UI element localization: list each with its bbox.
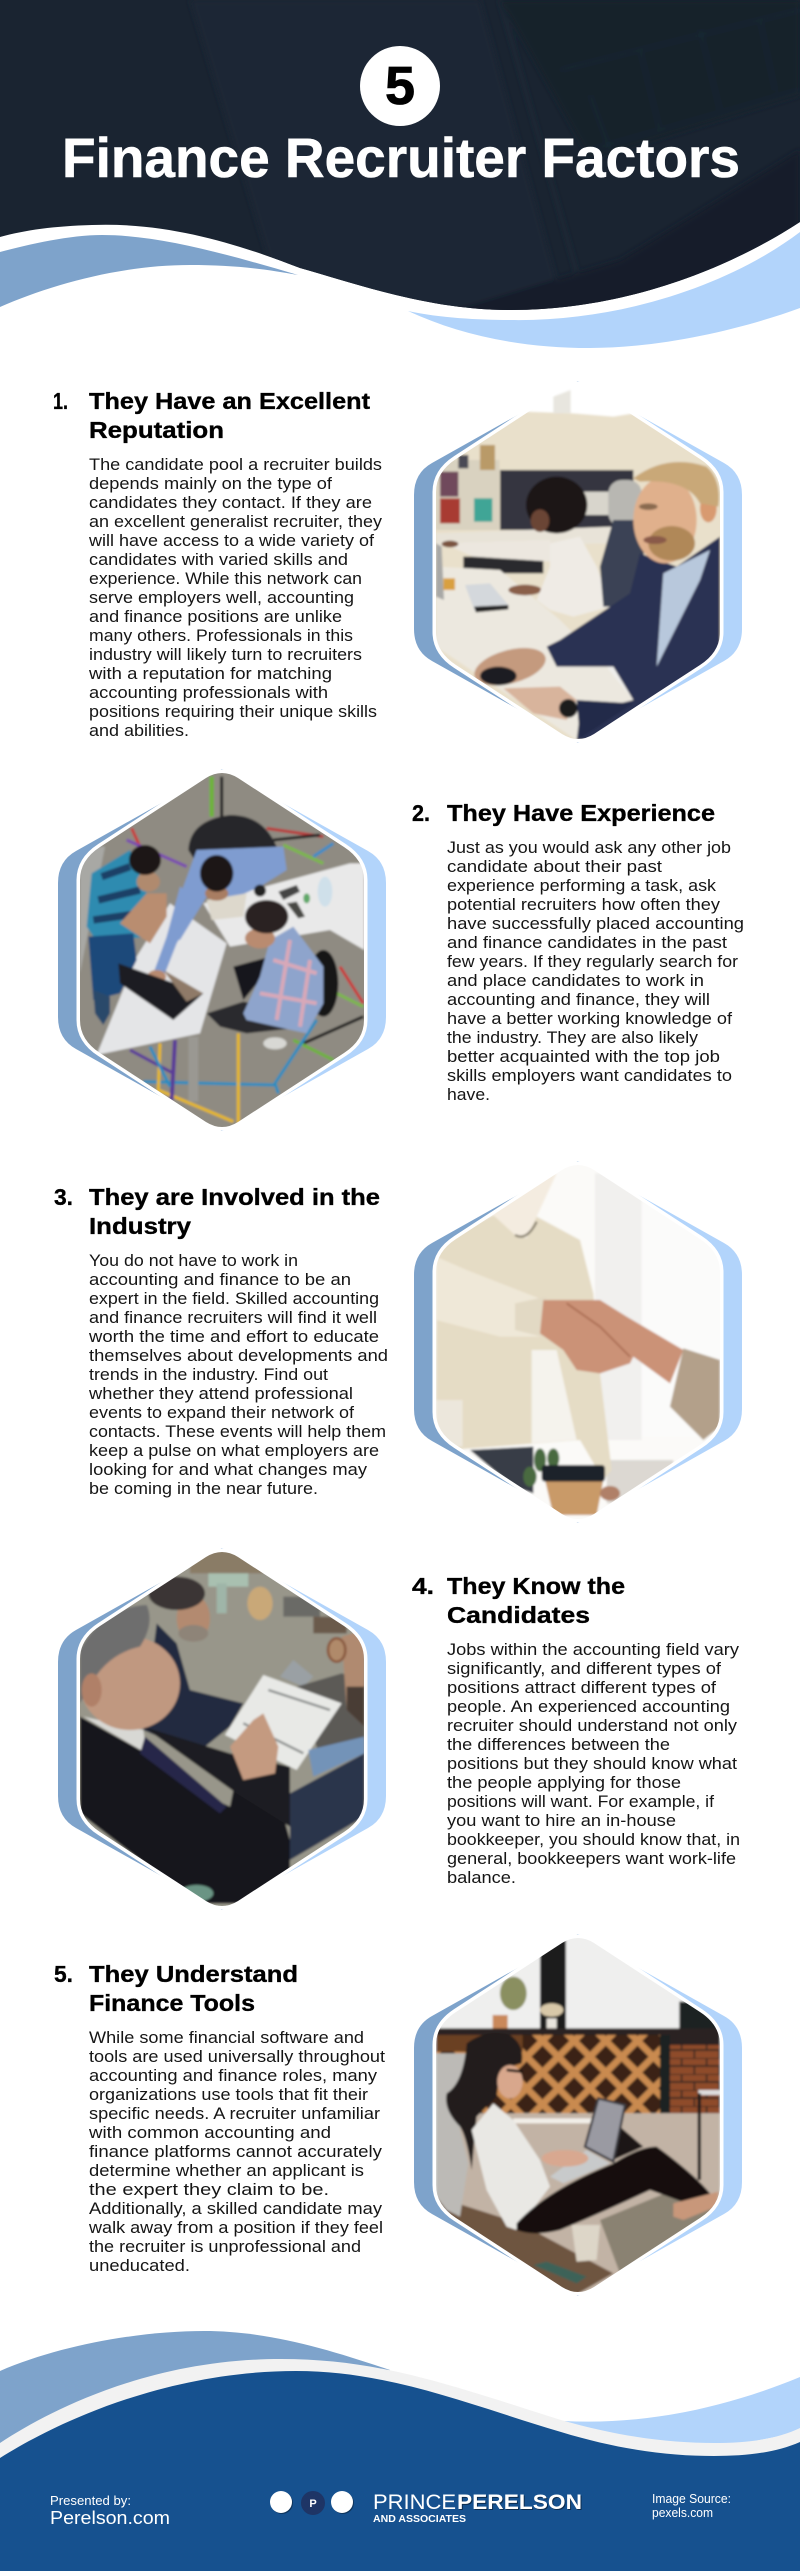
body text 4: bookkeeper, you should know that, in [447, 1831, 740, 1849]
heading 4: Candidates [447, 1602, 590, 1628]
body text 5: finance platforms cannot accurately [89, 2143, 383, 2161]
body text 1: experience. While this network can [89, 570, 362, 588]
image source: pexels.com [652, 2506, 713, 2520]
body text 2: candidate about their past [447, 858, 662, 876]
section 2: experience [30, 760, 744, 1140]
body text 4: recruiter should understand not only [447, 1717, 738, 1735]
body text 4: the people applying for those [447, 1774, 681, 1792]
body text 2: few years. If they regularly search for [447, 953, 739, 971]
section 4: know the candidates [30, 1540, 740, 1920]
heading 4: They Know the [447, 1573, 625, 1599]
body text 2: have successfully placed accounting [447, 915, 744, 933]
logo [270, 2491, 582, 2525]
header right wave [408, 232, 800, 348]
logo: PERELSON [457, 2491, 582, 2514]
body text 1: many others. Professionals in this [89, 627, 353, 645]
body text 3: worth the time and effort to educate [88, 1328, 379, 1346]
heading 5: They Understand [89, 1961, 298, 1987]
heading 1: They Have an Excellent [89, 388, 370, 414]
footer [0, 2331, 800, 2571]
footer divider band [0, 2359, 800, 2571]
body text 1: an excellent generalist recruiter, they [89, 513, 383, 531]
body text 2: Just as you would ask any other job [447, 839, 731, 857]
heading 3 [54, 1184, 380, 1239]
presented by: Presented by: [50, 2494, 131, 2508]
body text 4: people. An experienced accounting [447, 1698, 730, 1716]
body text 5: the recruiter is unprofessional and [89, 2238, 361, 2256]
body text 5: Additionally, a skilled candidate may [89, 2200, 383, 2218]
body text 1: with a reputation for matching [88, 665, 332, 683]
body text 5: tools are used universally throughout [89, 2048, 385, 2066]
body text 5: While some financial software and [89, 2029, 364, 2047]
heading 2: They Have Experience [447, 800, 715, 826]
body text 3: contacts. These events will help them [89, 1423, 386, 1441]
body text 2 [447, 839, 744, 1104]
hexagon photo 4: businessmen reviewing chart [58, 1548, 386, 1910]
body text 3: expert in the field. Skilled accounting [89, 1290, 379, 1308]
heading 4: 4. [412, 1573, 434, 1599]
image source [652, 2492, 731, 2520]
body text 2: have. [447, 1086, 490, 1104]
body text 2: accounting and finance, they will [447, 991, 710, 1009]
body text 5: accounting and finance roles, many [89, 2067, 378, 2085]
section 5: finance tools [54, 1934, 742, 2296]
body text 3: looking for and what changes may [89, 1461, 368, 1479]
body text 3 [88, 1252, 388, 1498]
header photo background [0, 0, 800, 330]
title: Finance Recruiter Factors [62, 126, 740, 189]
body text 5 [88, 2029, 385, 2275]
body text 4: Jobs within the accounting field vary [447, 1641, 740, 1659]
body text 2: have a better working knowledge of [447, 1010, 732, 1028]
body text 3: accounting and finance to be an [89, 1271, 351, 1289]
body text 4: significantly, and different types of [447, 1660, 721, 1678]
body text 4: positions attract different types of [447, 1679, 716, 1697]
section 1: excellent reputation [54, 381, 742, 743]
footer panel [0, 2371, 800, 2571]
presented by: Perelson.com [50, 2508, 170, 2528]
body text 1: positions requiring their unique skills [89, 703, 377, 721]
heading 1 [53, 388, 370, 443]
image source: Image Source: [652, 2492, 731, 2506]
body text 3: trends in the industry. Find out [89, 1366, 328, 1384]
body text 4: balance. [447, 1869, 516, 1887]
body text 5: specific needs. A recruiter unfamiliar [89, 2105, 381, 2123]
header left wave [0, 235, 298, 307]
header banner [0, 0, 800, 348]
hexagon photo 3: handshake [414, 1161, 742, 1523]
body text 4: general, bookkeepers want work-life [447, 1850, 736, 1868]
body text 2: better acquainted with the top job [447, 1048, 720, 1066]
body text 2: experience performing a task, ask [447, 877, 717, 895]
section 3: involved in the industry [54, 1161, 742, 1523]
body text 3: and finance recruiters will find it well [89, 1309, 377, 1327]
body text 2: and place candidates to work in [447, 972, 704, 990]
body text 1: candidates with varied skills and [89, 551, 348, 569]
heading 3: Industry [89, 1213, 191, 1239]
hexagon photo 2: team around table [58, 769, 386, 1131]
body text 3: keep a pulse on what employers are [89, 1442, 379, 1460]
body text 5: with common accounting and [88, 2124, 331, 2142]
body text 2: the industry. They are also likely [447, 1029, 699, 1047]
body text 5: uneducated. [89, 2257, 190, 2275]
heading 2: 2. [412, 800, 430, 826]
body text 4: you want to hire an in-house [447, 1812, 676, 1830]
body text 1: will have access to a wide variety of [88, 532, 374, 550]
body text 1: and abilities. [89, 722, 189, 740]
body text 5: walk away from a position if they feel [88, 2219, 383, 2237]
body text 1: The candidate pool a recruiter builds [89, 456, 382, 474]
logo: PRINCE [373, 2491, 456, 2514]
heading 5: Finance Tools [89, 1990, 255, 2016]
footer right wave [564, 2377, 800, 2448]
heading 3: They are Involved in the [89, 1184, 380, 1210]
body text 4: positions will want. For example, if [447, 1793, 714, 1811]
heading 3: 3. [54, 1184, 73, 1210]
heading 5: 5. [54, 1961, 73, 1987]
presented by [50, 2494, 170, 2528]
body text 1 [88, 456, 383, 740]
body text 1: depends mainly on the type of [89, 475, 332, 493]
body text 5: determine whether an applicant is [89, 2162, 364, 2180]
heading 1: 1. [53, 388, 68, 414]
body text 1: serve employers well, accounting [89, 589, 354, 607]
hexagon photo 1: office workers [414, 381, 742, 743]
hexagon photo 5: woman with laptop on floor [414, 1934, 742, 2296]
body text 4 [447, 1641, 740, 1887]
body text 4: positions but they should know what [447, 1755, 737, 1773]
heading 1: Reputation [89, 417, 224, 443]
body text 5: organizations use tools that fit their [89, 2086, 369, 2104]
body text 4: the differences between the [447, 1736, 670, 1754]
number badge: 5 [385, 56, 415, 116]
body text 1: accounting professionals with [89, 684, 328, 702]
logo: P [309, 2498, 317, 2510]
body text 3: You do not have to work in [89, 1252, 298, 1270]
body text 1: candidates they contact. If they are [89, 494, 372, 512]
heading 5 [54, 1961, 298, 2016]
body text 1: industry will likely turn to recruiters [89, 646, 362, 664]
heading 4 [412, 1573, 625, 1628]
body text 3: themselves about developments and [89, 1347, 388, 1365]
body text 3: whether they attend professional [88, 1385, 353, 1403]
body text 2: skills employers want candidates to [447, 1067, 732, 1085]
body text 2: potential recruiters how often they [447, 896, 721, 914]
body text 1: and finance positions are unlike [89, 608, 342, 626]
body text 2: and finance candidates in the past [447, 934, 727, 952]
body text 3: be coming in the near future. [89, 1480, 318, 1498]
logo: AND ASSOCIATES [373, 2514, 466, 2525]
body text 5: the expert they claim to be. [89, 2181, 329, 2199]
body text 3: events to expand their network of [89, 1404, 354, 1422]
footer left wave [0, 2331, 390, 2460]
number badge [360, 46, 440, 126]
